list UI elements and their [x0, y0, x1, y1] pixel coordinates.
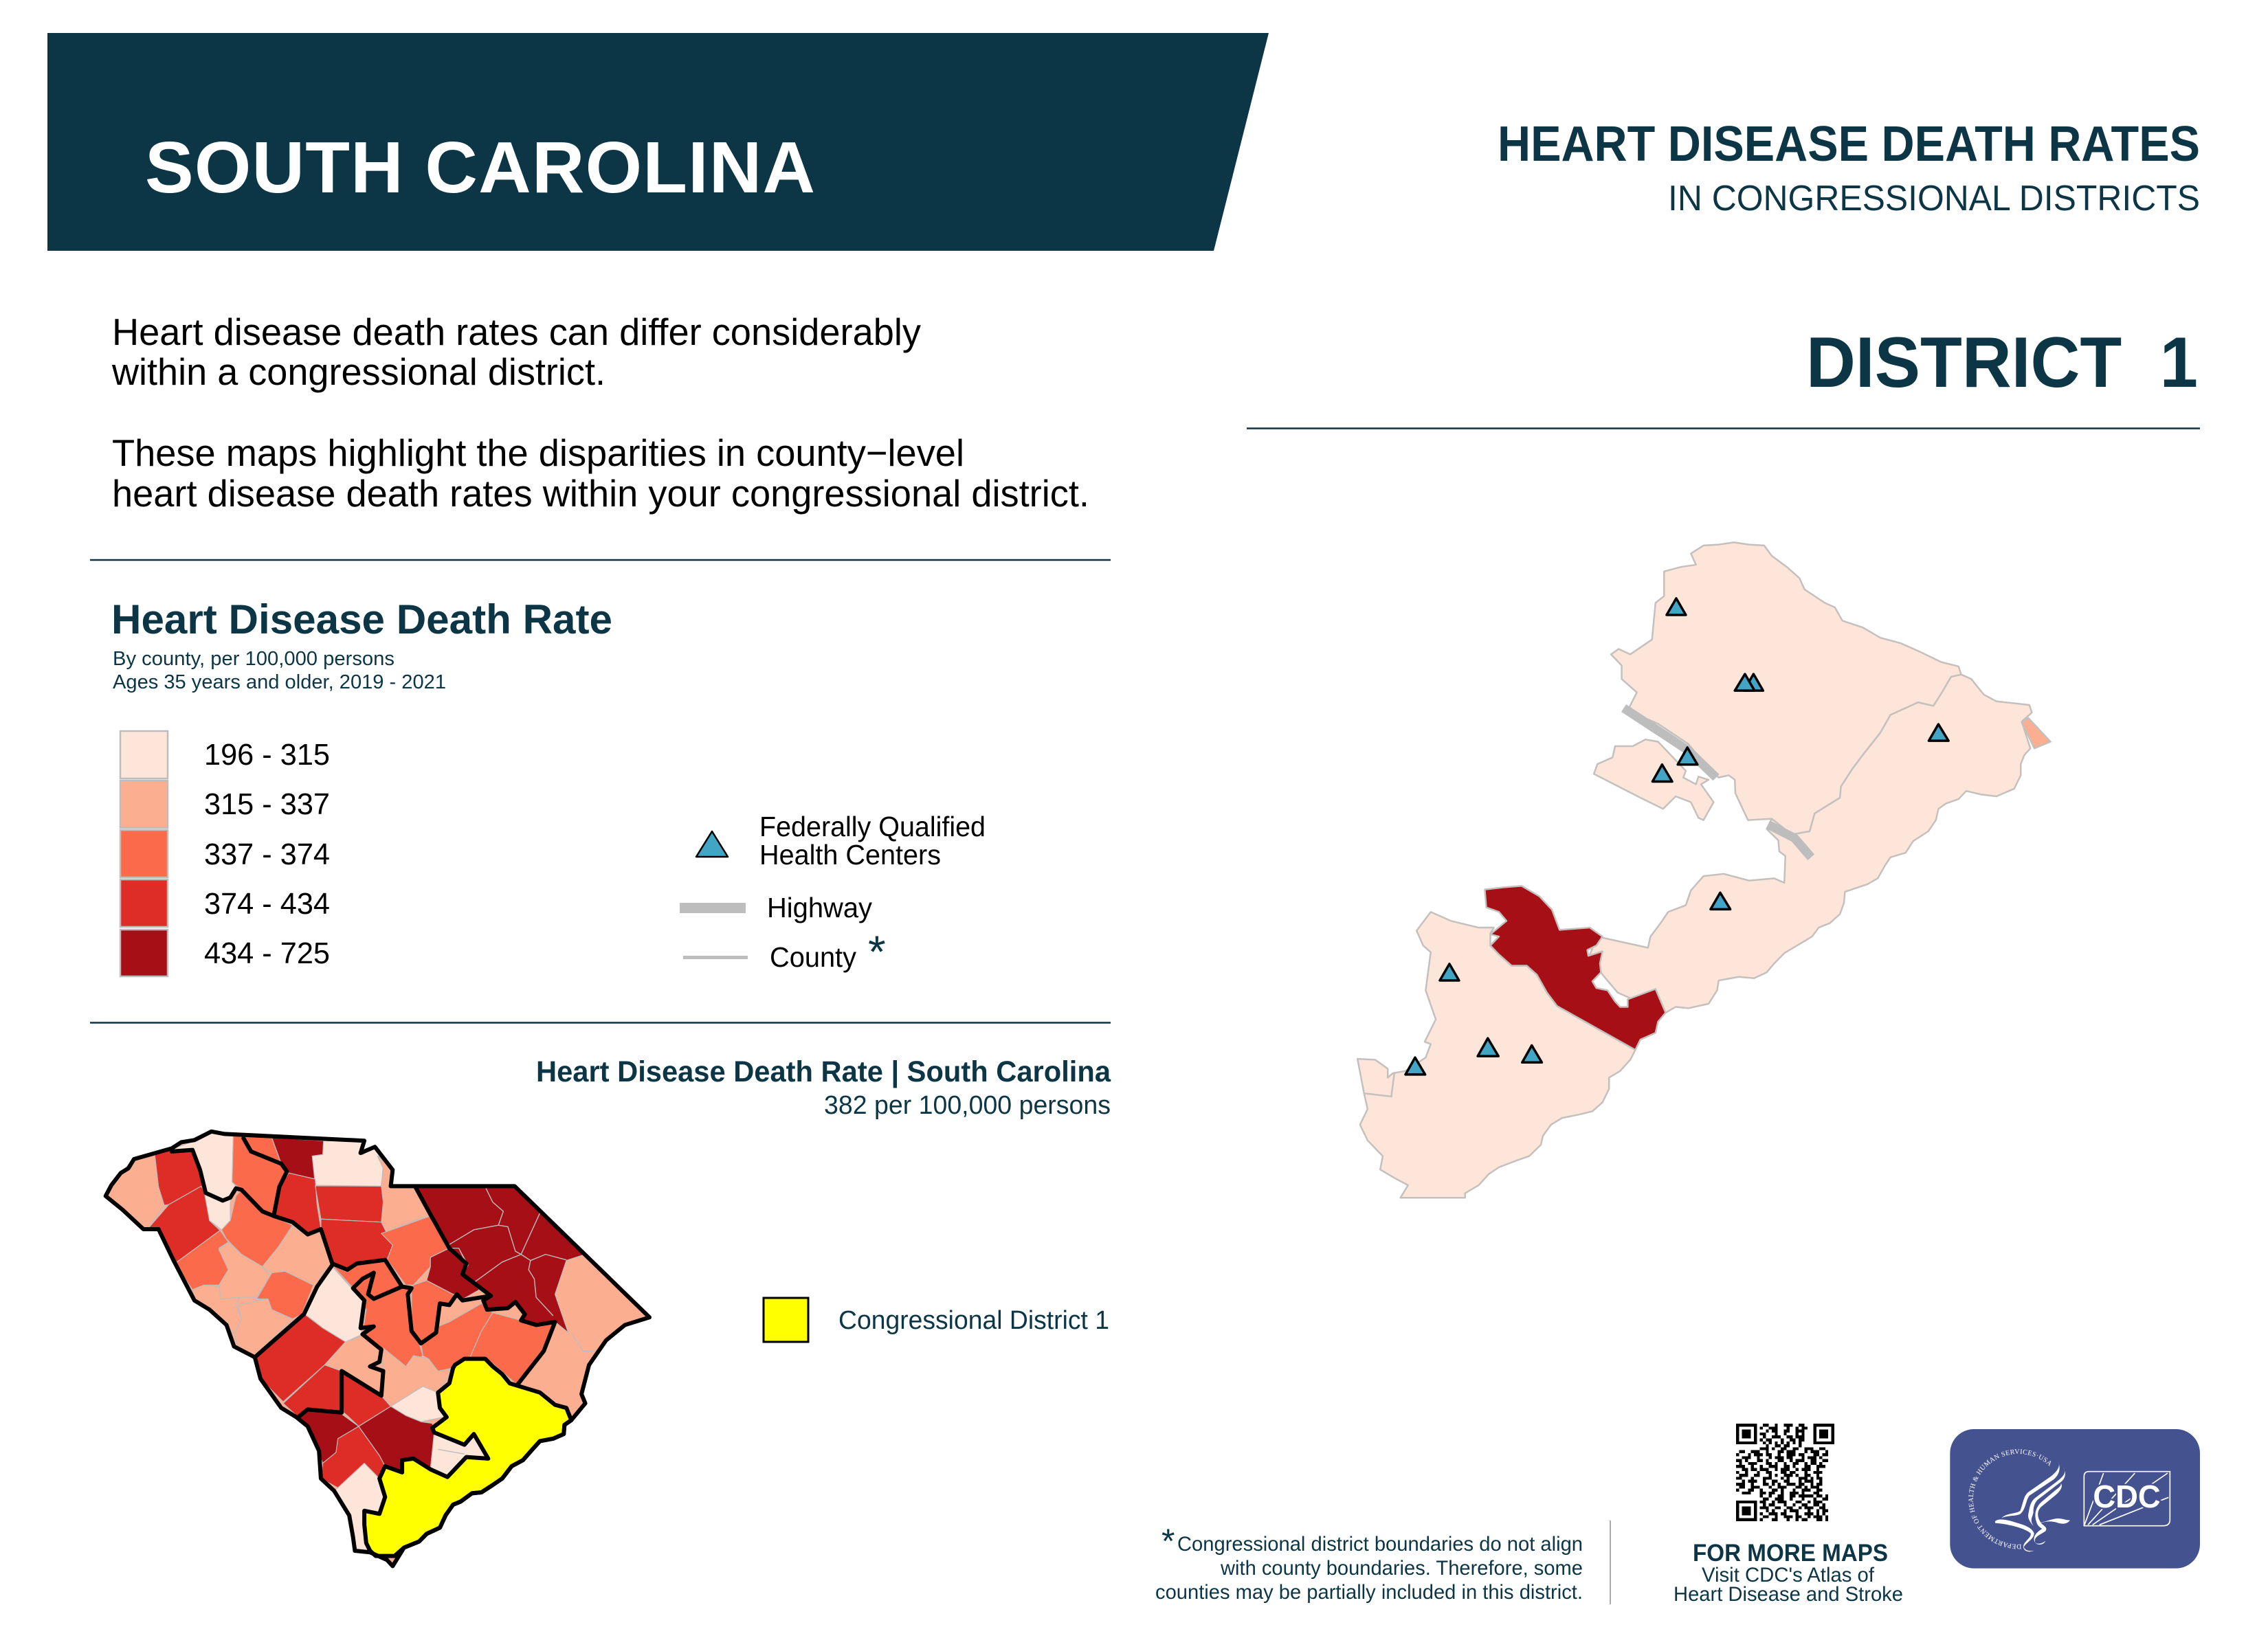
header banner: South Carolina	[47, 33, 1269, 251]
intro text block: Heart disease death rates can differ considerably	[112, 311, 921, 353]
legend: map symbols: Federally Qualified	[759, 811, 986, 842]
health center markers	[1405, 598, 1948, 1075]
legend: map symbols: Highway	[767, 892, 872, 923]
footnote: Congressional district boundaries do not align	[1177, 1533, 1583, 1556]
state average caption: 382 per 100,000 persons	[824, 1091, 1111, 1120]
legend: rate classes: 196 - 315	[204, 738, 330, 772]
report title: HEART DISEASE DEATH RATES	[1498, 117, 2200, 172]
state map legend: district swatch	[764, 1298, 1109, 1342]
legend: rate classes: 337 - 374	[204, 838, 330, 871]
footnote: *	[1161, 1522, 1175, 1560]
legend heading: By county, per 100,000 persons	[113, 648, 394, 670]
call to action: FOR MORE MAPS	[1693, 1540, 1888, 1567]
district heading: DISTRICT 1	[1806, 323, 2198, 403]
CDC mark	[2084, 1472, 2170, 1526]
state map legend: district swatch: Congressional District 1	[838, 1306, 1109, 1335]
legend: rate classes: 315 - 337	[204, 787, 330, 821]
call to action: Heart Disease and Stroke	[1674, 1583, 1903, 1606]
legend: rate classes: 374 - 434	[204, 887, 330, 921]
call to action: Visit CDC's Atlas of	[1702, 1564, 1875, 1586]
QR code	[1736, 1425, 1834, 1520]
footnote: with county boundaries. Therefore, some	[1220, 1557, 1583, 1580]
call to action	[1674, 1540, 1903, 1606]
footnote	[1155, 1522, 1583, 1604]
legend: map symbols: County	[770, 941, 856, 973]
district map: counties in District 1	[1357, 542, 2051, 1198]
legend: rate classes	[120, 731, 330, 976]
HHS and CDC logo panel	[1950, 1429, 2200, 1569]
legend: map symbols: Health Centers	[759, 839, 941, 871]
legend heading: Heart Disease Death Rate	[111, 596, 612, 642]
intro text block	[111, 311, 1089, 515]
header banner: South Carolina: SOUTH CAROLINA	[145, 127, 815, 208]
CDC mark: CDC	[2093, 1479, 2161, 1514]
state average caption: Heart Disease Death Rate | South Carolina	[536, 1055, 1111, 1088]
intro text block: These maps highlight the disparities in county−level	[112, 431, 964, 474]
intro text block: within a congressional district.	[111, 350, 605, 393]
legend: map symbols: *	[868, 926, 886, 977]
report title	[1498, 117, 2200, 218]
intro text block: heart disease death rates within your congressional district.	[112, 472, 1089, 515]
legend: rate classes: 434 - 725	[204, 936, 330, 970]
HHS seal: DEPARTMENT OF HEALTH & HUMAN SERVICES·USA	[1968, 1449, 2051, 1549]
legend: map symbols	[680, 811, 986, 977]
state average caption	[536, 1055, 1111, 1120]
legend heading	[111, 596, 612, 693]
state map: South Carolina counties with district 1 highlighted	[106, 1132, 649, 1566]
report title: IN CONGRESSIONAL DISTRICTS	[1668, 179, 2200, 218]
legend heading: Ages 35 years and older, 2019 - 2021	[113, 671, 446, 693]
footnote: counties may be partially included in this district.	[1155, 1581, 1583, 1604]
highways	[1624, 708, 1811, 857]
